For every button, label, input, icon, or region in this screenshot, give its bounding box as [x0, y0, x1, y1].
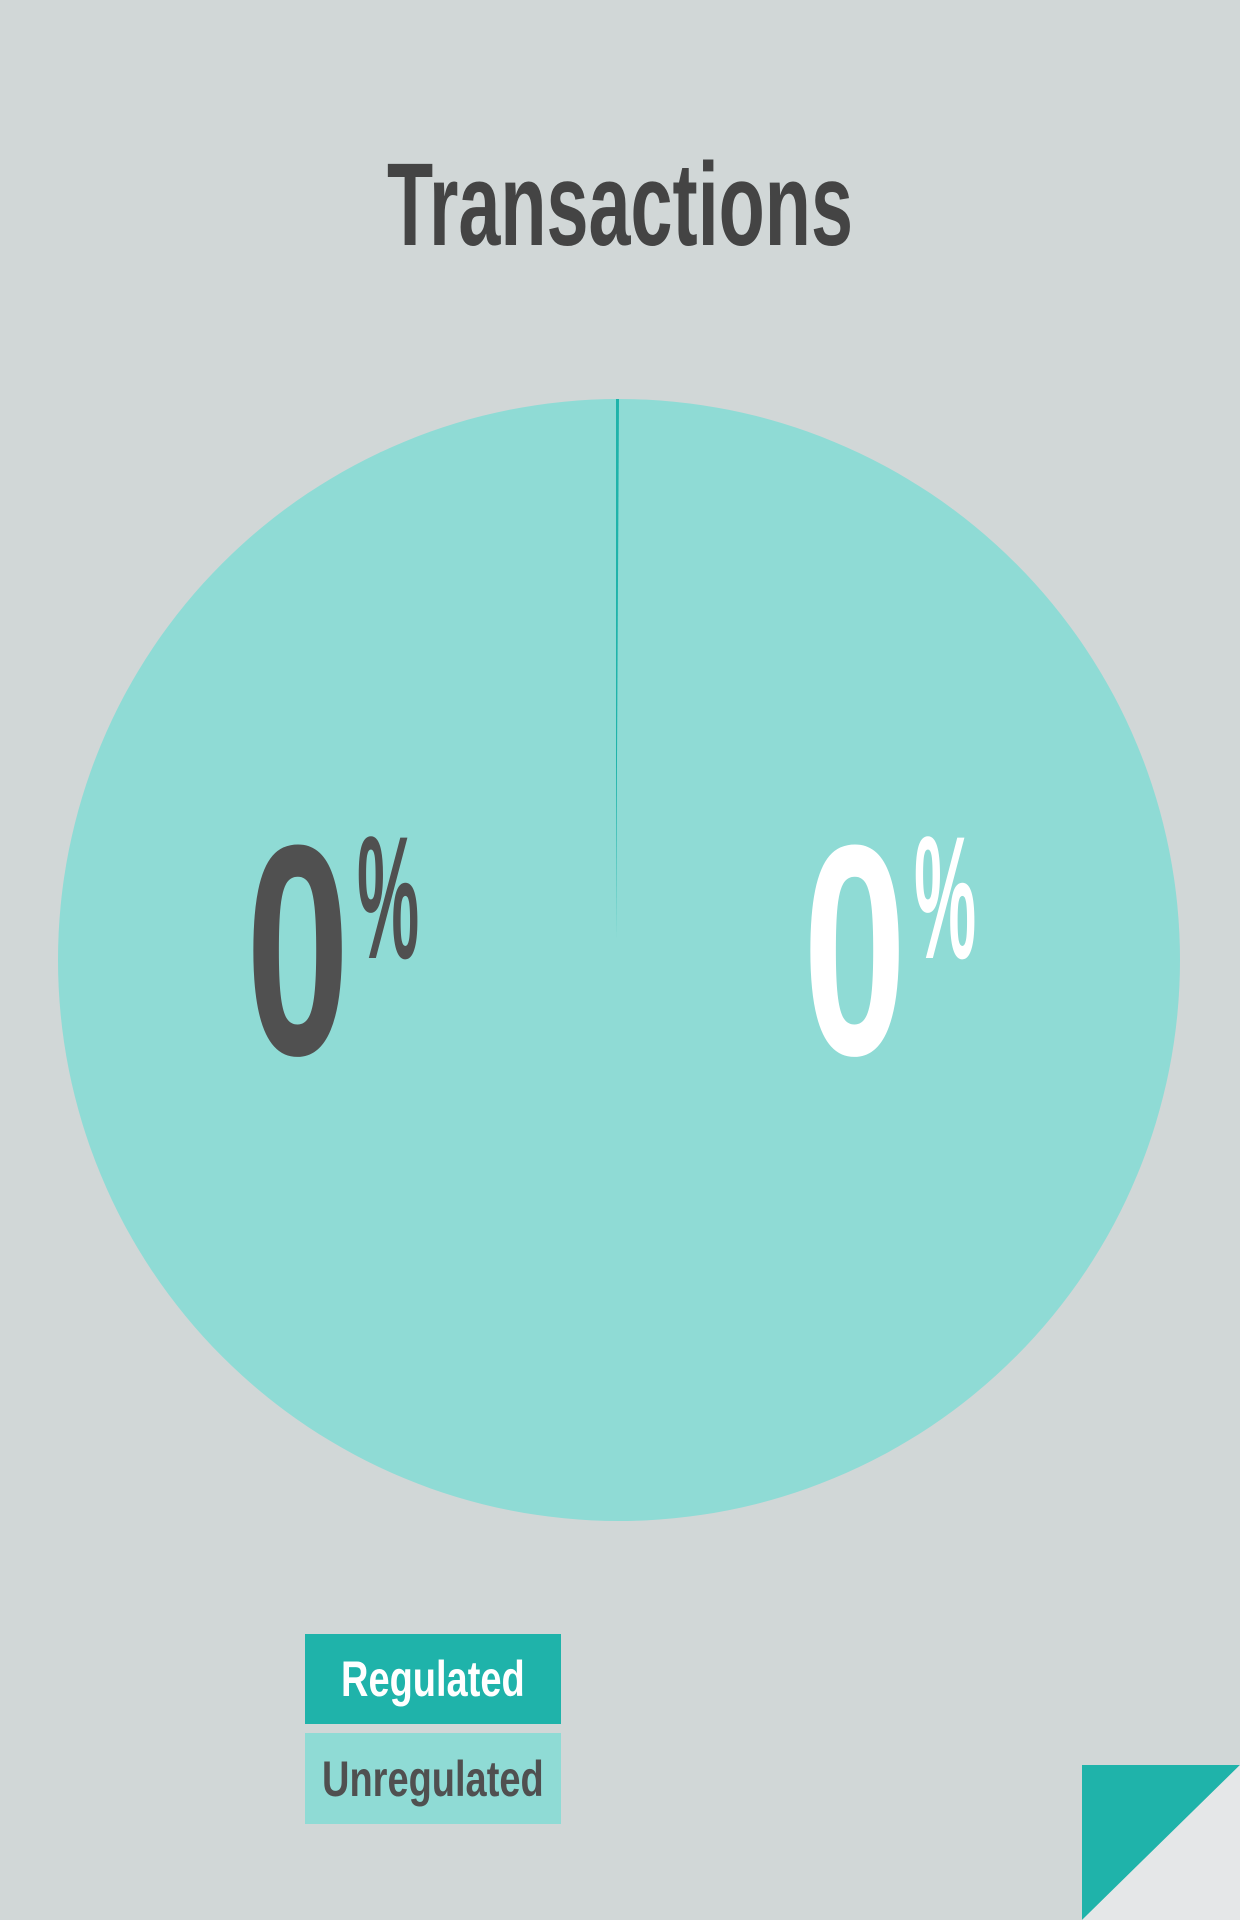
legend: regulated: Regulated: [341, 1651, 525, 1707]
corner fold: [1082, 1765, 1240, 1920]
legend: unregulated: Unregulated: [322, 1750, 544, 1806]
legend: regulated: [305, 1634, 561, 1724]
label: regulated 0%: [246, 782, 419, 1118]
label: unregulated 0%: [803, 782, 976, 1118]
label: unregulated 0%: %: [914, 801, 976, 996]
title: Transactions: [387, 139, 853, 271]
legend: unregulated: [305, 1733, 561, 1824]
legend: [305, 1634, 561, 1824]
label: unregulated 0%: 0: [803, 782, 906, 1118]
label: regulated 0%: 0: [246, 782, 349, 1118]
label: regulated 0%: %: [357, 801, 419, 996]
